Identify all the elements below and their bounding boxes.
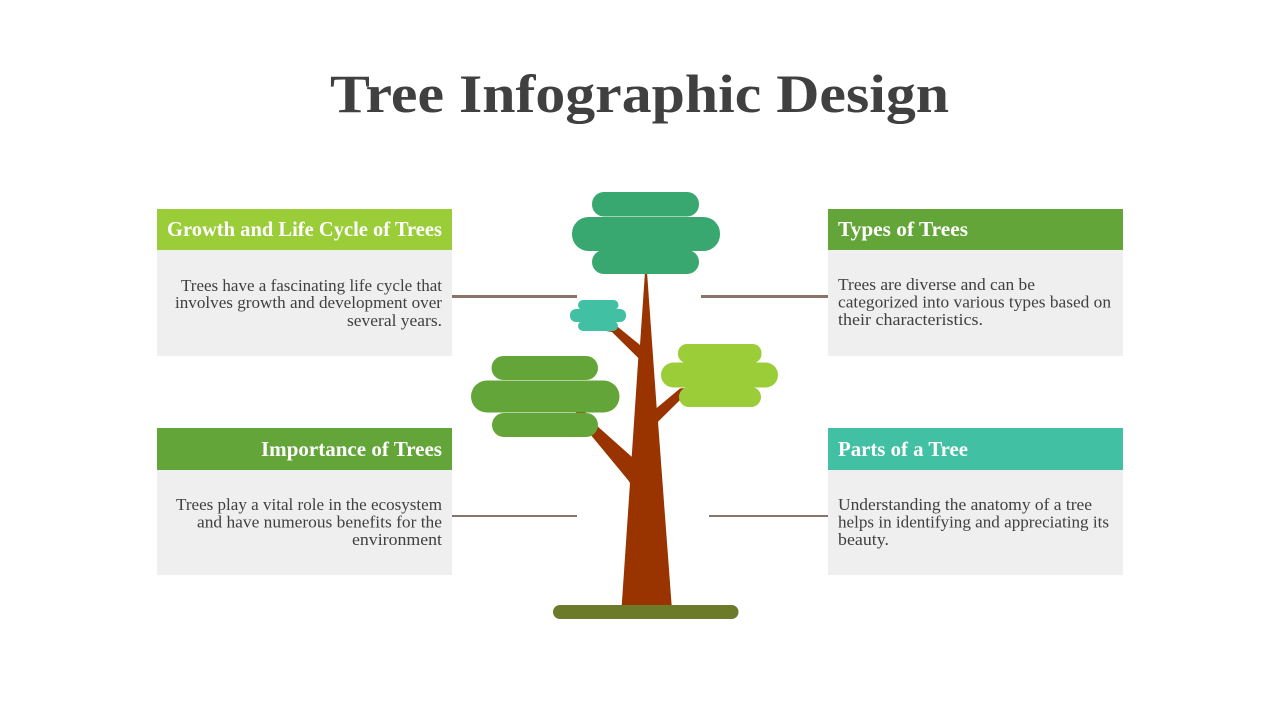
panel: types of trees: [828, 209, 1123, 356]
crown: light green: [661, 344, 778, 407]
text: importance of trees: Trees play a vital role in the ecosystem: [176, 495, 442, 514]
crown: green: [471, 356, 620, 437]
text: parts of a tree: [838, 495, 1109, 549]
trunk and branches: [575, 272, 689, 606]
text: importance of trees: [176, 495, 442, 549]
connector: top left: [452, 295, 577, 298]
text: types of trees: [838, 275, 1111, 329]
connector: bottom left: [452, 515, 577, 517]
text: growth and life cycle: several years.: [347, 311, 442, 330]
text: types of trees: their characteristics.: [838, 310, 983, 329]
panel: parts of a tree: [828, 428, 1123, 575]
panel: importance of trees: [157, 428, 452, 575]
text: growth and life cycle: [175, 276, 443, 330]
text: importance of trees: and have numerous benefits for the: [197, 512, 442, 532]
heading: growth and life cycle: Growth and Life Cycle of Trees: [167, 217, 442, 241]
text: types of trees: categorized into various types based on: [838, 292, 1111, 312]
panel: growth and life cycle: [157, 209, 452, 356]
text: growth and life cycle: Trees have a fascinating life cycle that: [181, 276, 442, 295]
connector: bottom right: [709, 515, 828, 517]
connector: top right: [701, 295, 828, 298]
tree illustration: [471, 192, 778, 619]
text: parts of a tree: helps in identifying and appreciating its: [838, 512, 1109, 532]
text: parts of a tree: Understanding the anatomy of a tree: [838, 495, 1092, 514]
text: types of trees: Trees are diverse and can be: [838, 275, 1035, 294]
crown: top: [572, 192, 720, 274]
heading: parts of a tree: Parts of a Tree: [838, 437, 968, 461]
crown: teal: [570, 300, 626, 331]
text: growth and life cycle: involves growth and development over: [175, 293, 443, 312]
text: parts of a tree: beauty.: [838, 530, 889, 549]
text: importance of trees: environment: [352, 530, 442, 549]
title: Tree Infographic Design: [330, 64, 949, 124]
heading: importance of trees: Importance of Trees: [261, 437, 442, 461]
ground: [553, 605, 738, 619]
heading: types of trees: Types of Trees: [838, 217, 968, 241]
